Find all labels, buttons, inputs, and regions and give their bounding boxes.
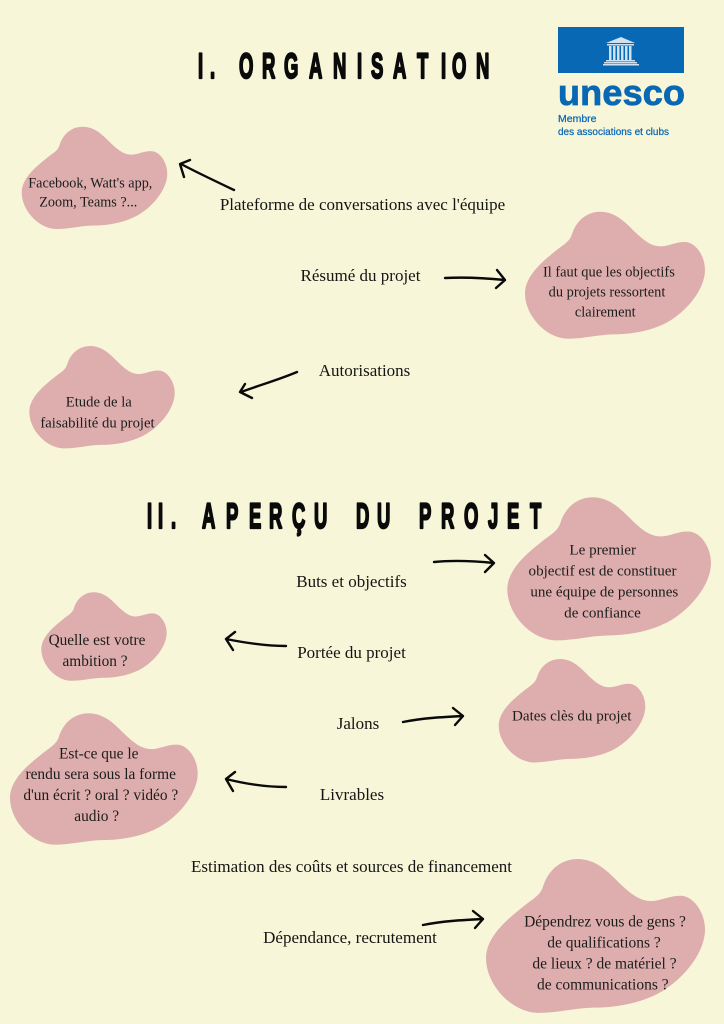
blob: premier objectif <box>507 497 711 640</box>
label: jalons: Jalons <box>337 714 379 733</box>
label: dépendance, recrutement: Dépendance, recrutement <box>263 928 437 947</box>
label: résumé du projet: Résumé du projet <box>301 266 421 285</box>
arrow: vers ambition <box>226 632 286 650</box>
blob: forme du rendu <box>10 713 198 845</box>
blob: objectifs clairs: du projets ressortent <box>549 285 665 301</box>
logo: UNESCO: des associations et clubs <box>558 126 669 138</box>
title: I. Organisation: I. ORGANISATION <box>198 45 489 86</box>
logo: UNESCO: Membre <box>558 113 597 125</box>
label: livrables: Livrables <box>320 785 384 804</box>
blob: dates clés <box>499 659 645 762</box>
blob: plateformes <box>22 127 167 229</box>
logo: UNESCO: unesco <box>558 72 685 113</box>
arrow: vers objectifs clairs <box>445 270 505 288</box>
label: plateforme de conversations: Plateforme de conversations avec l'équipe <box>220 195 505 214</box>
arrow: vers dates clés <box>403 708 463 725</box>
blob: objectifs clairs <box>525 212 705 339</box>
blob: objectifs clairs: clairement <box>575 305 636 321</box>
blob: plateformes: Facebook, Watt's app, <box>28 175 152 191</box>
blob: faisabilité: Etude de la <box>66 395 132 411</box>
arrow: vers dépendances <box>423 911 483 928</box>
label: portée du projet: Portée du projet <box>297 643 406 662</box>
blob: forme du rendu: Est-ce que le <box>59 745 139 762</box>
blob: plateformes: Zoom, Teams ?... <box>39 195 137 211</box>
icon: temple <box>603 37 639 66</box>
arrow: vers premier objectif <box>434 555 494 572</box>
blob: objectifs clairs: Il faut que les objectifs <box>543 265 675 281</box>
blob: dépendances: Dépendrez vous de gens ? <box>524 914 686 931</box>
blob: dépendances: de qualifications ? <box>547 935 661 952</box>
blob: ambition: ambition ? <box>62 653 128 670</box>
blob: dates clés: Dates clès du projet <box>512 709 632 725</box>
blob: forme du rendu: rendu sera sous la forme <box>25 766 176 783</box>
arrow: vers plateformes <box>180 160 234 190</box>
blob: dépendances: de communications ? <box>537 976 669 993</box>
arrow: vers faisabilité <box>240 372 297 398</box>
blob: premier objectif: Le premier <box>569 542 636 558</box>
blob: dépendances: de lieux ? de matériel ? <box>532 956 677 973</box>
blob: dépendances <box>486 859 705 1013</box>
label: autorisations: Autorisations <box>319 361 410 380</box>
title: II. Aperçu du projet: II. APERÇU DU PROJET <box>147 495 541 536</box>
blob: premier objectif: de confiance <box>564 605 641 621</box>
blob: forme du rendu: audio ? <box>74 808 119 825</box>
label: buts et objectifs: Buts et objectifs <box>296 572 407 591</box>
blob: ambition: Quelle est votre <box>49 632 146 649</box>
blob: faisabilité: faisabilité du projet <box>40 415 155 431</box>
arrow: vers forme du rendu <box>226 772 286 791</box>
blob: ambition <box>41 592 167 681</box>
blob: forme du rendu: d'un écrit ? oral ? vidéo ? <box>23 787 178 804</box>
logo: UNESCO <box>558 27 685 138</box>
blob: premier objectif: une équipe de personnes <box>530 585 678 601</box>
blob: premier objectif: objectif est de constituer <box>529 563 676 579</box>
label: estimation des coûts: Estimation des coûts et sources de financement <box>191 857 512 876</box>
blob: faisabilité <box>29 346 175 448</box>
